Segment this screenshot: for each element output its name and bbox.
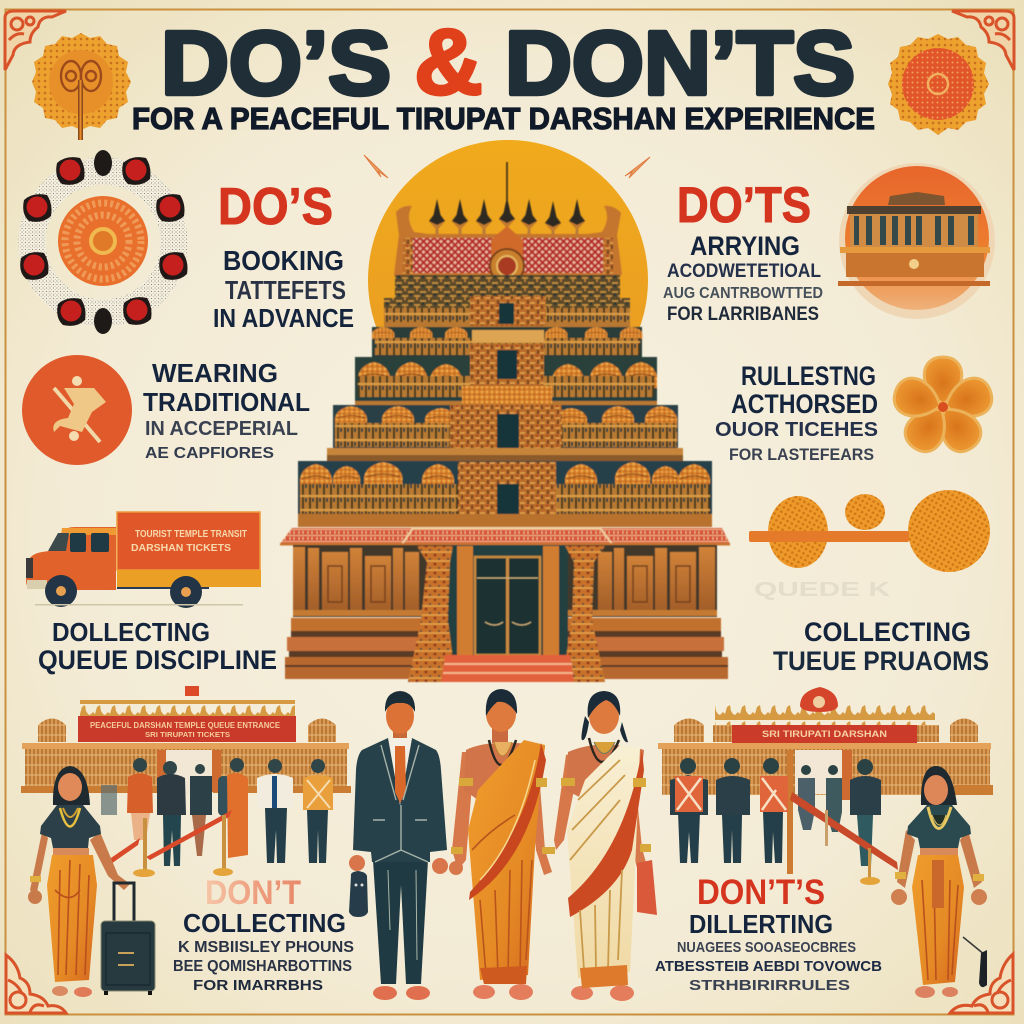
title: & xyxy=(414,9,483,114)
text: queue discipline xyxy=(38,617,277,675)
text: dillerting: NUAGEES SOOASEOCBRES xyxy=(677,939,856,956)
text: dillerting: STRHBIRIRRULES xyxy=(689,977,850,994)
eave xyxy=(280,528,730,546)
steps xyxy=(285,618,728,679)
sun disc xyxy=(368,140,648,420)
text: arriving: AUG CANTRBOWTTED xyxy=(663,285,823,302)
entrance steps xyxy=(441,655,574,682)
text: rulleting authorised: FOR LASTEFEARS xyxy=(729,445,874,464)
tier C xyxy=(372,327,642,357)
corner ornament: bottom right xyxy=(950,954,1013,1013)
text: collecting mobile phones: K MSBIISLEY PHOUNS xyxy=(178,939,354,956)
text: rulleting authorised: OUOR TICEHES xyxy=(715,419,878,441)
heading: DO'TS: DO’TS xyxy=(677,177,811,233)
text: queue discipline: QUEUE DISCIPLINE xyxy=(38,645,277,675)
corner ornament: bottom left xyxy=(6,955,66,1013)
icon: delivery truck: TOURIST TEMPLE TRANSIT xyxy=(135,529,247,540)
text: collecting tueue xyxy=(773,617,989,676)
text: arriving xyxy=(663,231,823,325)
icon: flower garland xyxy=(20,150,187,334)
door xyxy=(446,545,568,657)
title: DO’S xyxy=(161,14,391,114)
tier A xyxy=(395,275,620,298)
briefcase xyxy=(349,871,368,917)
title: DON’TS xyxy=(505,14,855,114)
text: queue discipline: DOLLECTING xyxy=(52,617,210,647)
spark left xyxy=(364,155,388,178)
tier D xyxy=(355,344,657,405)
text: arriving: ARRYING xyxy=(690,231,800,261)
corner ornament: top right xyxy=(952,11,1014,70)
stick xyxy=(963,937,987,987)
text: rulleting authorised xyxy=(715,361,878,464)
right temple gate: SRI TIRUPATI DARSHAN xyxy=(762,729,887,739)
icon: building in orange circle xyxy=(838,163,995,319)
central temple xyxy=(280,162,730,682)
text: rulleting authorised: ACTHORSED xyxy=(731,389,878,419)
text: rulleting authorised: RULLESTNG xyxy=(741,361,876,391)
text: dillerting: DILLERTING xyxy=(689,909,833,939)
top left medallion xyxy=(32,33,131,140)
text: collecting mobile phones: BEE QOMISHARBOTTINS xyxy=(173,958,352,975)
left temple gate: PEACEFUL DARSHAN TEMPLE QUEUE ENTRANCE xyxy=(90,721,281,730)
top right medallion xyxy=(888,34,989,135)
icon: five petal flower xyxy=(890,357,996,458)
text: wearing traditional: WEARING xyxy=(152,358,278,388)
text: booking tickets xyxy=(213,245,354,333)
icon: orange balls on a bar xyxy=(749,490,990,572)
text: collecting mobile phones: FOR IMARRBHS xyxy=(193,977,323,994)
left woman figure xyxy=(28,766,130,997)
central figure: woman in cream sari xyxy=(554,691,657,1001)
left rope barrier xyxy=(108,810,233,877)
text: wearing traditional: TRADITIONAL xyxy=(143,387,310,417)
text: wearing traditional: AE CAPFIORES xyxy=(145,445,274,462)
text: arriving: ACODWETETIOAL xyxy=(667,261,821,282)
text: booking tickets: TATTEFETS xyxy=(225,275,346,305)
suitcase xyxy=(101,883,155,995)
heading: DO'S: DO’S xyxy=(218,178,333,236)
central figure: woman in orange sari xyxy=(449,689,555,1000)
right woman figure xyxy=(891,766,987,998)
subtitle: FOR A PEACEFUL TIRUPAT DARSHAN EXPERIENCE xyxy=(132,101,875,136)
text: wearing traditional: IN ACCEPERIAL xyxy=(145,418,298,440)
left temple gate: SRI TIRUPATI TICKETS xyxy=(145,732,230,739)
text: collecting mobile phones: COLLECTING xyxy=(183,908,346,938)
roof lattice xyxy=(394,206,622,283)
text: arriving: FOR LARRIBANES xyxy=(667,304,819,325)
icon: orange circle xyxy=(22,355,132,465)
central figure: man in suit xyxy=(349,691,448,1000)
icon: delivery truck: DARSHAN TICKETS xyxy=(131,543,231,554)
faded heading: DON'T: DON’T xyxy=(205,874,301,912)
tier F xyxy=(298,461,712,527)
finials xyxy=(429,162,585,236)
left temple gate xyxy=(21,686,351,794)
spark right xyxy=(625,157,650,178)
heading: DON'T'S: DON’T’S xyxy=(697,873,825,912)
tier E xyxy=(327,405,683,461)
left queue people xyxy=(101,758,333,866)
title xyxy=(161,9,855,114)
ornate columns xyxy=(408,546,605,682)
icon: delivery truck xyxy=(26,512,261,608)
text: dillerting: ATBESSTEIB AEBDI TOVOWCB xyxy=(655,958,882,975)
faded label: QUEDE K xyxy=(754,579,891,601)
text: collecting tueue: COLLECTING xyxy=(804,617,971,647)
corner ornament: top left xyxy=(5,11,66,70)
right queue people xyxy=(670,758,881,866)
tier B xyxy=(384,296,630,327)
text: dillerting xyxy=(655,909,882,994)
lower hall xyxy=(293,545,717,617)
text: booking tickets: BOOKING xyxy=(223,245,344,276)
right rope barrier xyxy=(790,792,898,885)
right temple gate xyxy=(658,687,993,874)
text: booking tickets: IN ADVANCE xyxy=(213,303,354,333)
text: collecting tueue: TUEUE PRUAOMS xyxy=(773,646,989,676)
text: wearing traditional xyxy=(143,358,310,462)
text: collecting mobile phones xyxy=(173,908,354,994)
